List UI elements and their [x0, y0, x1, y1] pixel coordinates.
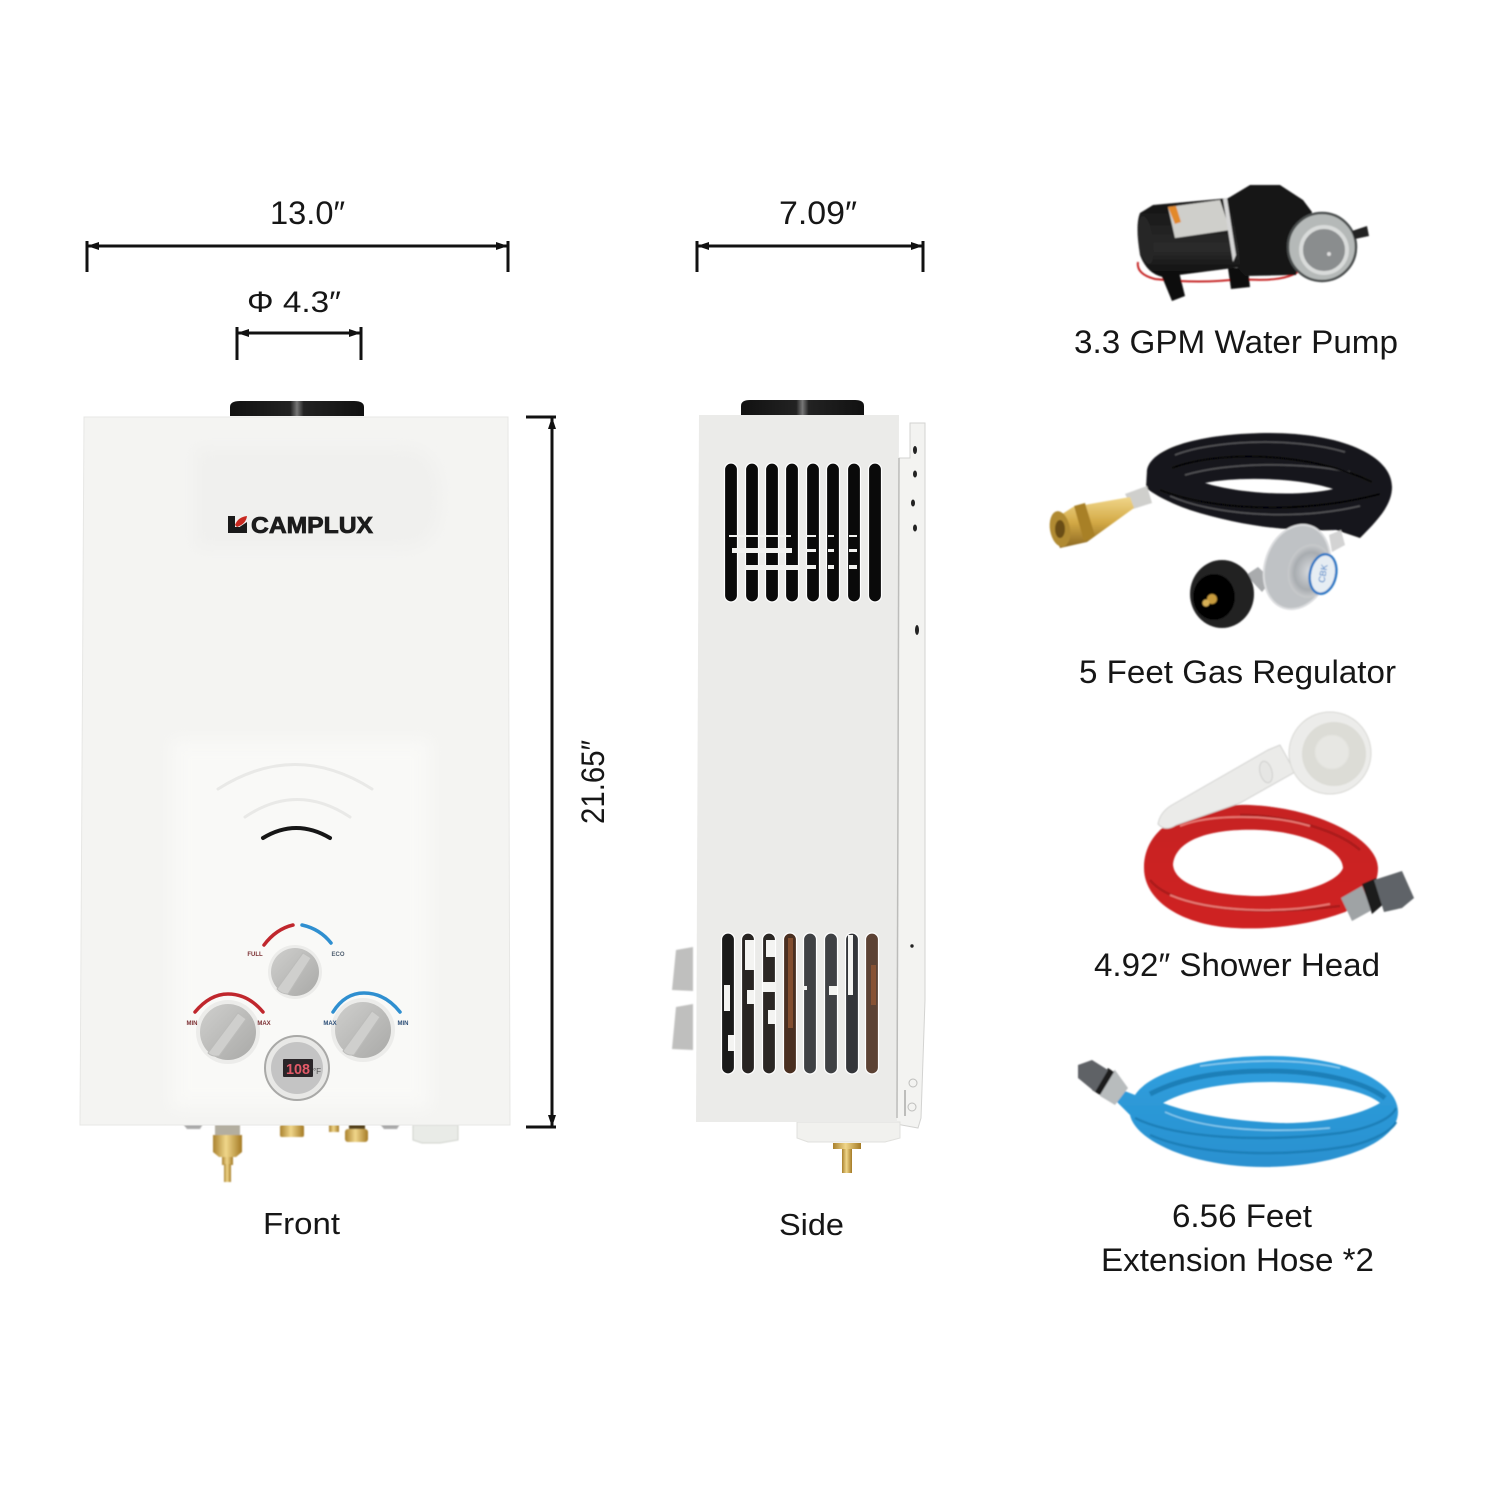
top vent slots — [724, 463, 882, 602]
accessory: water pump — [1136, 185, 1369, 301]
side panel — [696, 415, 899, 1122]
accessory: gas regulator hose: CBK — [1317, 563, 1330, 583]
interior parts seen through bottom slots — [724, 935, 853, 1051]
knob: gas: MAX — [257, 1021, 271, 1027]
flue cap — [741, 400, 864, 415]
red wires — [1138, 262, 1302, 282]
hose highlights — [1170, 442, 1360, 515]
label: water pump: 3.3 GPM Water Pump — [1074, 324, 1398, 360]
knob: power mode: ECO — [331, 952, 345, 958]
flue cap — [230, 401, 364, 416]
temperature display: °F — [313, 1067, 321, 1076]
dimension: side depth 7.09 inches: 7.09″ — [779, 195, 857, 231]
inner shadow band — [1150, 1071, 1385, 1098]
accessory: gas regulator hose — [1047, 433, 1392, 628]
dimension: side depth 7.09 inches — [697, 195, 923, 272]
label: Side: Side — [779, 1207, 844, 1242]
dimension: flue diameter 4.3 inches: Φ 4.3″ — [247, 286, 341, 319]
clear inlet filter — [1288, 213, 1356, 281]
hose nipple — [1352, 226, 1369, 239]
valve neck — [1246, 567, 1272, 592]
temperature display: 108 — [286, 1061, 310, 1078]
label: shower head: 4.92″ Shower Head — [1094, 947, 1380, 983]
label: extension hose — [1101, 1198, 1374, 1278]
ferrule — [1125, 486, 1152, 509]
knob: power mode: FULL — [247, 952, 263, 958]
logo background panel — [195, 448, 440, 548]
hose connector — [1100, 1070, 1128, 1105]
temperature display — [265, 1036, 329, 1100]
mounting plate — [896, 423, 925, 1128]
knob: gas — [186, 994, 271, 1064]
label: Front: Front — [263, 1206, 340, 1241]
accessory: shower head with red hose — [1144, 712, 1414, 928]
motor cylinder — [1138, 198, 1241, 277]
brass pin — [1207, 594, 1217, 604]
bottom cover and gas fitting — [797, 1122, 900, 1142]
dimension: front width 13.0 inches — [87, 195, 508, 272]
bottom fittings — [183, 1124, 458, 1182]
front view of water heater — [80, 401, 510, 1182]
plate holes — [910, 446, 919, 948]
knob: water — [323, 993, 408, 1062]
left side fittings — [672, 947, 693, 991]
knob: water: MAX — [323, 1021, 337, 1027]
bottom vent slots — [722, 933, 878, 1074]
plate screws — [905, 1079, 917, 1116]
red hose coil — [1144, 805, 1378, 928]
label: extension hose: Extension Hose *2 — [1101, 1242, 1374, 1278]
knob: water: MIN — [398, 1021, 408, 1027]
flame window arcs — [218, 764, 372, 838]
shower handle — [1158, 745, 1295, 828]
heater body — [80, 417, 510, 1125]
black POL knob — [1190, 560, 1254, 628]
black hose coil — [1146, 433, 1392, 538]
dimension: height 21.65 inches: 21.65″ — [575, 740, 611, 824]
hose coil — [1116, 1056, 1398, 1167]
label: gas regulator: 5 Feet Gas Regulator — [1079, 654, 1396, 690]
silver collar — [1329, 530, 1345, 552]
dimension: height 21.65 inches — [526, 417, 611, 1127]
knob: gas: MIN — [186, 1021, 198, 1027]
pump head — [1225, 185, 1312, 276]
blue Cbk badge — [1306, 552, 1340, 596]
dimension: flue diameter 4.3 inches — [237, 286, 361, 360]
side view of water heater — [672, 400, 925, 1173]
shower head — [1289, 712, 1371, 794]
label: extension hose: 6.56 Feet — [1172, 1198, 1312, 1234]
logo: Camplux: CAMPLUX — [251, 512, 374, 538]
knob: power mode — [247, 925, 345, 999]
regulator body — [1253, 516, 1341, 618]
lower control panel shading — [172, 740, 430, 1108]
brass quick connect — [1050, 497, 1134, 548]
pump feet — [1160, 268, 1185, 301]
interior fins seen through top slots — [729, 535, 857, 570]
accessory: blue extension hose — [1078, 1056, 1398, 1167]
motor label — [1168, 200, 1230, 238]
hose connector — [1341, 886, 1372, 921]
metal band — [1223, 198, 1236, 262]
dimension: front width 13.0 inches: 13.0″ — [270, 195, 345, 231]
